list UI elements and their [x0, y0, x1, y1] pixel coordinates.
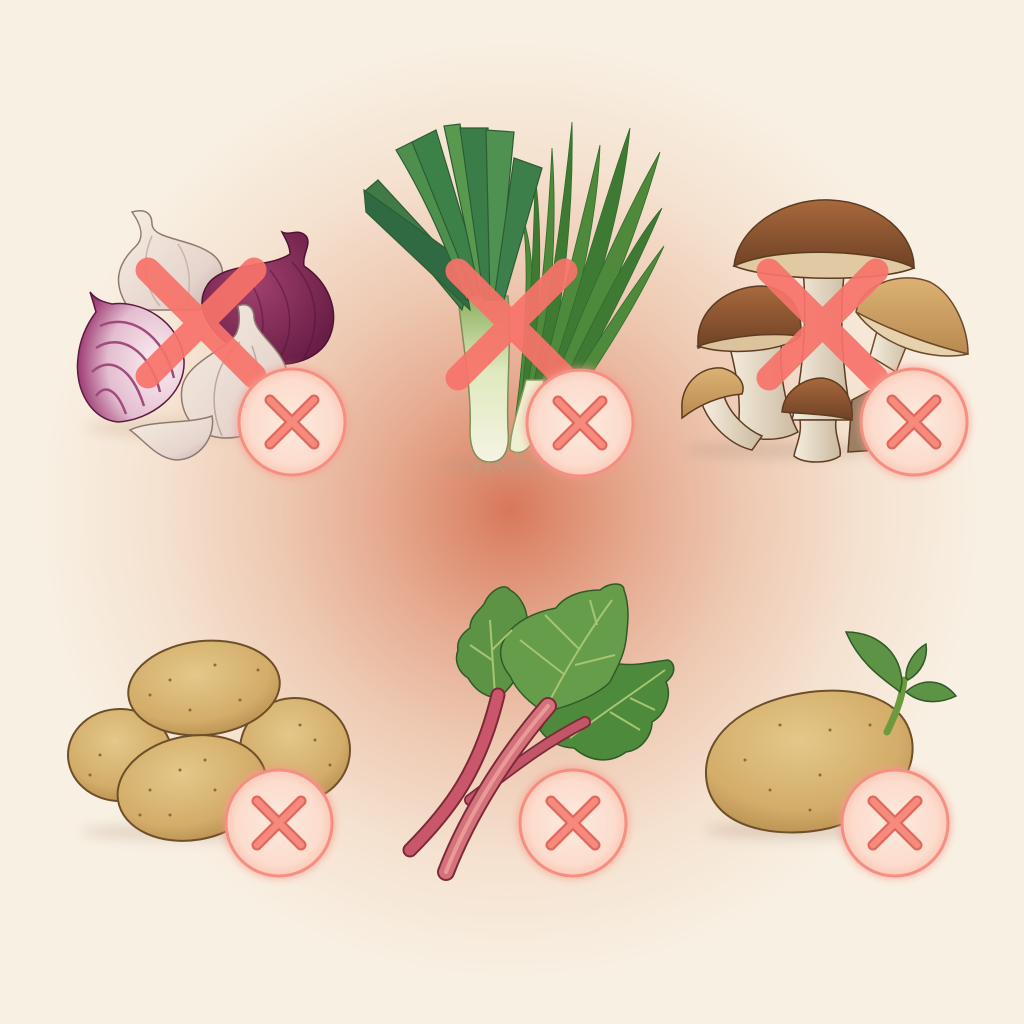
icon: back stem	[848, 380, 890, 452]
icon: garlic clove	[130, 416, 213, 460]
panel: leek and chives	[364, 122, 664, 479]
icon: cut red onion	[77, 292, 184, 422]
icon: back garlic bulb	[119, 211, 222, 310]
icon: top potato	[124, 633, 284, 743]
icon: second onion stalk	[510, 380, 544, 452]
icon: large red cross	[148, 270, 254, 376]
icon: right mushroom	[856, 278, 968, 372]
icon: cross badge	[858, 366, 970, 478]
panel: rhubarb	[410, 584, 674, 879]
potato speckles	[88, 664, 332, 816]
icon: front potato	[109, 724, 275, 852]
icon: large red cross	[769, 271, 876, 378]
icon: rhubarb stalks	[410, 695, 585, 872]
panel: pile of potatoes	[68, 633, 350, 879]
icon: leek stalk	[458, 296, 509, 462]
panel: sprouting potato	[705, 632, 956, 879]
icon: roots	[474, 452, 524, 474]
icon: cross badge	[839, 767, 951, 879]
icon: rhubarb leaves	[456, 584, 674, 760]
icon: potato	[706, 691, 913, 832]
icon: left potato	[68, 709, 172, 801]
icon: red onion whole	[202, 232, 334, 364]
icon: top mushroom	[734, 200, 914, 420]
icon: cross badge	[223, 767, 335, 879]
icon: cross badge	[524, 367, 636, 479]
icon: small left mushroom	[682, 368, 762, 450]
icon: small front mushroom	[782, 378, 852, 462]
icon: sprout	[846, 632, 956, 732]
icon: right potato	[240, 698, 350, 802]
icon: leek leaves	[364, 124, 542, 310]
icon: chives	[512, 122, 664, 440]
panel: onions and garlic	[77, 211, 348, 478]
potato speckles	[744, 724, 872, 812]
panel: mushrooms	[682, 200, 970, 478]
icon: cross badge	[517, 767, 629, 879]
icon: cross badge	[236, 366, 348, 478]
icon: large red cross	[458, 271, 565, 378]
icon: left mushroom	[698, 286, 801, 439]
icon: front garlic bulb	[181, 305, 288, 438]
